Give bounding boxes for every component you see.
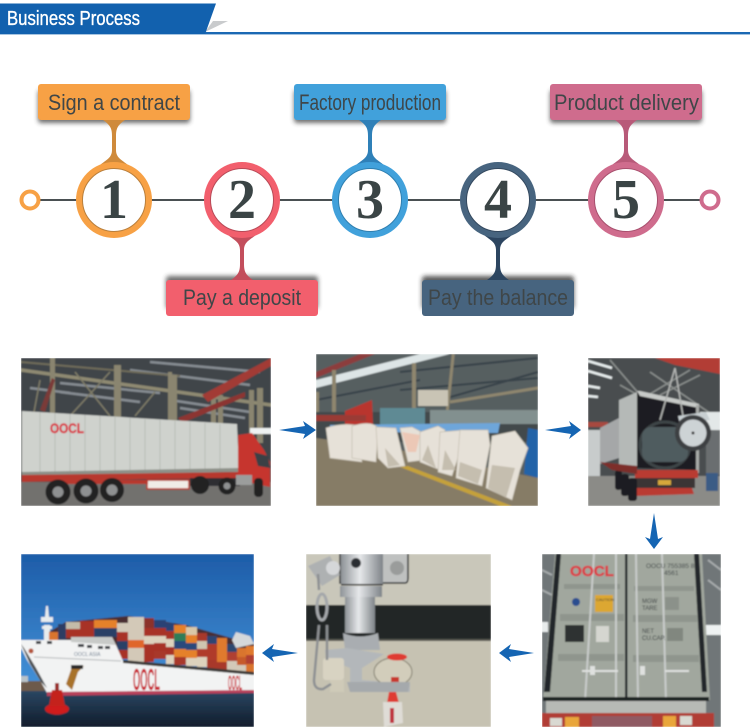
step 1: sign a contract <box>38 84 190 238</box>
photo: transformer loaded into container <box>588 358 720 506</box>
photo: container doors: CAUTION <box>596 597 614 602</box>
step 5: product delivery: Product delivery <box>554 90 699 115</box>
text: OOCL <box>228 672 242 695</box>
step 4: pay the balance: Pay the balance <box>428 285 568 310</box>
step 4: pay the balance <box>422 162 574 316</box>
step 3: factory production <box>294 84 446 238</box>
photo: container doors: CU.CAP. <box>642 636 666 642</box>
step 2: pay a deposit <box>166 162 318 316</box>
arrow right 1 <box>279 421 316 439</box>
heading: Business Process <box>7 8 140 30</box>
photo: container doors: OOCL <box>570 563 614 580</box>
step 1: sign a contract: 1 <box>100 169 128 231</box>
step 5: product delivery: 5 <box>612 169 640 231</box>
start marker <box>22 192 38 208</box>
step 2: pay a deposit: 2 <box>228 169 256 231</box>
photo: container doors: NET <box>642 629 654 635</box>
step 4: pay the balance: 4 <box>484 169 512 231</box>
photo: container doors <box>542 554 721 727</box>
arrow left 1 <box>499 644 534 662</box>
photo: container truck in workshop: OOCL <box>50 420 84 436</box>
arrow right 2 <box>545 421 581 439</box>
photo: container doors: OOCU 755385 8 <box>646 563 695 570</box>
photo: container doors: MGW <box>642 599 658 605</box>
end marker <box>702 192 718 208</box>
photo: container ship: OOCL ASIA <box>74 652 101 658</box>
arrow down <box>645 513 663 549</box>
photo: container lock and seal <box>306 554 491 727</box>
step 1: sign a contract: Sign a contract <box>48 90 180 115</box>
photo: container ship: OOCL <box>133 662 160 697</box>
step 3: factory production: Factory production <box>299 90 441 115</box>
step 2: pay a deposit: Pay a deposit <box>183 285 301 310</box>
photo: container ship <box>21 554 254 727</box>
step 3: factory production: 3 <box>356 169 384 231</box>
header banner <box>0 4 750 34</box>
photo: container doors: TARE <box>642 606 658 612</box>
photo: container doors: 4561 <box>664 570 679 577</box>
photo: container truck in workshop <box>21 358 271 506</box>
photo: wrapped goods in workshop <box>316 354 538 506</box>
step 5: product delivery <box>550 84 702 238</box>
process timeline <box>22 192 718 208</box>
arrow left 2 <box>262 644 298 662</box>
